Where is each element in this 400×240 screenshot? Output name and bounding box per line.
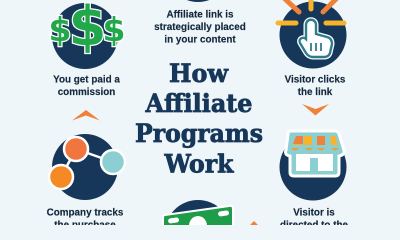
text: affiliate link is strategically placed: in your content [164, 34, 236, 46]
text: you get paid a commission: You get paid a [53, 74, 120, 86]
step: visitor clicks [278, 0, 346, 98]
title: Programs [135, 119, 263, 148]
arrow: down chevron [302, 104, 329, 116]
text: visitor clicks the link: the link [298, 87, 333, 98]
step: visitor directed [280, 131, 349, 231]
step: money [163, 200, 233, 240]
text: visitor clicks the link [285, 74, 346, 98]
step: commission [49, 0, 125, 98]
text: you get paid a commission: commission [58, 87, 115, 98]
text: company tracks the purchase [47, 208, 124, 231]
text: affiliate link is strategically placed [154, 10, 246, 46]
icon: linked nodes [49, 134, 125, 200]
text: visitor is directed to the: Visitor is [293, 208, 335, 218]
title: Work [164, 150, 234, 178]
text: visitor is directed to the [280, 208, 349, 231]
icon: top circle fragment [165, 0, 231, 2]
arrow: orange chevron to money [250, 221, 258, 225]
text: affiliate link is strategically placed: Affiliate link is [167, 10, 234, 20]
text: company tracks the purchase: Company tracks [47, 208, 124, 218]
icon: navy circle and banknote [163, 200, 233, 240]
text: you get paid a commission [53, 74, 120, 98]
arrow: up chevron [72, 110, 100, 120]
title: Affiliate [145, 89, 252, 118]
step: affiliate link placed [154, 0, 246, 46]
title: How [169, 59, 229, 88]
text: affiliate link is strategically placed: strategically placed [154, 22, 246, 33]
title [135, 59, 263, 178]
icon: dollar signs: $ [49, 10, 71, 49]
icon: dollar signs [49, 0, 125, 69]
step: company tracks [47, 134, 125, 231]
icon: dollar signs: $ [103, 10, 125, 49]
icon: pointer hand with rays [278, 0, 346, 68]
icon: storefront [280, 131, 346, 200]
text: visitor clicks the link: Visitor clicks [285, 74, 346, 86]
